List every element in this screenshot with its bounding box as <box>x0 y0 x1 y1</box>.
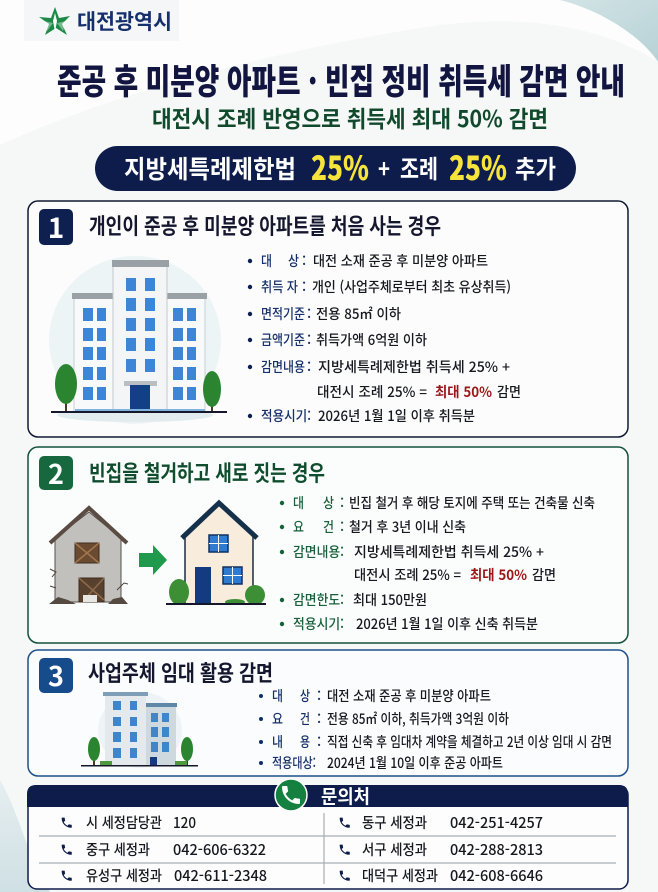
contact rows: 유성구 세정과 <box>86 865 162 886</box>
panel 2: demolish vacant house and rebuild <box>28 447 628 643</box>
details 3: 전용 85㎡ 이하, 취득가액 3억원 이하 <box>327 709 509 729</box>
details 1 <box>248 251 521 426</box>
banner: tax reduction formula: + <box>378 150 390 186</box>
contacts heading: 문의처 <box>321 782 370 809</box>
contact rows: 서구 세정과 <box>362 839 427 860</box>
details 2: 건 <box>323 517 334 537</box>
details 1: 취득가액 6억원 이하 <box>316 330 427 350</box>
badge 1: 1 <box>48 207 64 247</box>
details 2: 철거 후 3년 이내 신축 <box>349 517 466 537</box>
contact rows: 042-611-2348 <box>174 865 267 886</box>
details 3: : <box>317 686 321 706</box>
details 1: 전용 85㎡ 이하 <box>316 304 401 324</box>
illustration: rental buildings <box>81 692 198 768</box>
illustration: apartment building <box>49 256 227 424</box>
banner: tax reduction formula: 조례 <box>400 150 438 186</box>
illustration: old house <box>49 508 128 604</box>
details 1: : <box>307 357 311 377</box>
banner: tax reduction formula <box>95 142 576 191</box>
details 2: 대 <box>293 493 304 513</box>
details 3: 내 <box>272 732 283 752</box>
icon: city star emblem <box>39 7 70 35</box>
details 1: 적용시기: <box>261 406 311 426</box>
details 1: : <box>307 330 311 350</box>
details 3: 건 <box>300 709 310 729</box>
contact rows: 042-608-6646 <box>450 865 543 886</box>
details 1: 개인 (사업주체로부터 최초 유상취득) <box>312 277 511 297</box>
details 1: 취득 자 <box>261 277 298 297</box>
details 1: 감면 <box>497 382 521 402</box>
badge 2: 2 <box>48 453 64 492</box>
illustration: new house <box>166 503 266 605</box>
panel 3: developer rental relief <box>28 650 628 776</box>
icon: green phone badge <box>275 779 307 811</box>
details 1: 면적기준 <box>261 304 305 324</box>
details 3: 용 <box>300 732 310 752</box>
details 1: 최대 50% <box>435 382 492 402</box>
details 2: 상 <box>323 493 334 513</box>
details 3: 2024년 1월 10일 이후 준공 아파트 <box>327 753 503 773</box>
details 1: : <box>302 251 306 271</box>
details 1: 대전시 조례 25% = <box>317 382 427 402</box>
details 1: : <box>307 304 311 324</box>
details 2: 2026년 1월 1일 이후 신축 취득분 <box>356 614 538 634</box>
arrow <box>139 545 167 575</box>
logo: 대전광역시 <box>24 0 179 41</box>
contact rows: 동구 세정과 <box>362 812 427 833</box>
details 2: 감면 <box>532 565 556 585</box>
details 2: 감면내용: <box>293 542 344 562</box>
details 2 <box>280 493 595 634</box>
details 1: 대전 소재 준공 후 미분양 아파트 <box>313 251 488 271</box>
contact rows: 042-251-4257 <box>450 812 543 833</box>
contact rows: 시 세정담당관 <box>86 812 162 833</box>
badge 3 <box>39 655 73 694</box>
banner: tax reduction formula: 지방세특례제한법 <box>124 150 296 186</box>
details 2: 빈집 철거 후 해당 토지에 주택 또는 건축물 신축 <box>349 493 595 513</box>
details 3: 상 <box>300 686 310 706</box>
badge 1 <box>39 207 73 247</box>
banner: tax reduction formula: 25% <box>311 142 369 190</box>
details 2: : <box>340 517 344 537</box>
details 1: 대 <box>261 251 272 271</box>
subtitle: 대전시 조례 반영으로 취득세 최대 50% 감면 <box>152 100 548 134</box>
contact rows: 042-606-6322 <box>173 839 266 860</box>
details 1: 금액기준 <box>261 330 305 350</box>
contact rows: 042-288-2813 <box>450 839 543 860</box>
panel 1: individual first purchase <box>28 201 628 437</box>
details 1: 2026년 1월 1일 이후 취득분 <box>318 406 475 426</box>
details 2: 대전시 조례 25% = <box>354 565 461 585</box>
details 3: 대전 소재 준공 후 미분양 아파트 <box>327 686 491 706</box>
heading 2: 빈집을 철거하고 새로 짓는 경우 <box>89 456 325 488</box>
details 2: 최대 150만원 <box>353 590 427 610</box>
details 3: : <box>317 709 321 729</box>
details 1: 상 <box>288 251 299 271</box>
contact rows <box>62 812 543 886</box>
contact rows: 120 <box>173 812 196 833</box>
banner: tax reduction formula: 추가 <box>515 150 556 186</box>
details 3 <box>259 686 612 773</box>
heading 1: 개인이 준공 후 미분양 아파트를 처음 사는 경우 <box>89 209 441 241</box>
banner: tax reduction formula: 25% <box>449 142 507 190</box>
details 3: 요 <box>272 709 283 729</box>
logo wordmark: 대전광역시 <box>77 6 172 36</box>
details 2: 감면한도: <box>293 590 344 610</box>
details 3: 대 <box>272 686 283 706</box>
details 1: : <box>302 277 306 297</box>
contact rows: 중구 세정과 <box>86 839 150 860</box>
details 3: : <box>317 732 321 752</box>
details 2: : <box>340 493 344 513</box>
details 1: 지방세특례제한법 취득세 25% + <box>318 357 510 377</box>
details 1: 감면내용 <box>261 357 305 377</box>
contacts header bar <box>27 785 628 807</box>
badge 2 <box>39 453 73 492</box>
contact rows: 대덕구 세정과 <box>362 865 438 886</box>
badge 3: 3 <box>48 655 64 694</box>
details 2: 요 <box>293 517 304 537</box>
details 2: 지방세특례제한법 취득세 25% + <box>354 542 544 562</box>
details 2: 적용시기: <box>293 614 344 634</box>
details 2: 최대 50% <box>470 565 527 585</box>
heading 3: 사업주체 임대 활용 감면 <box>88 656 273 688</box>
panel: contacts <box>27 779 628 889</box>
details 3: 적용대상: <box>272 753 316 773</box>
